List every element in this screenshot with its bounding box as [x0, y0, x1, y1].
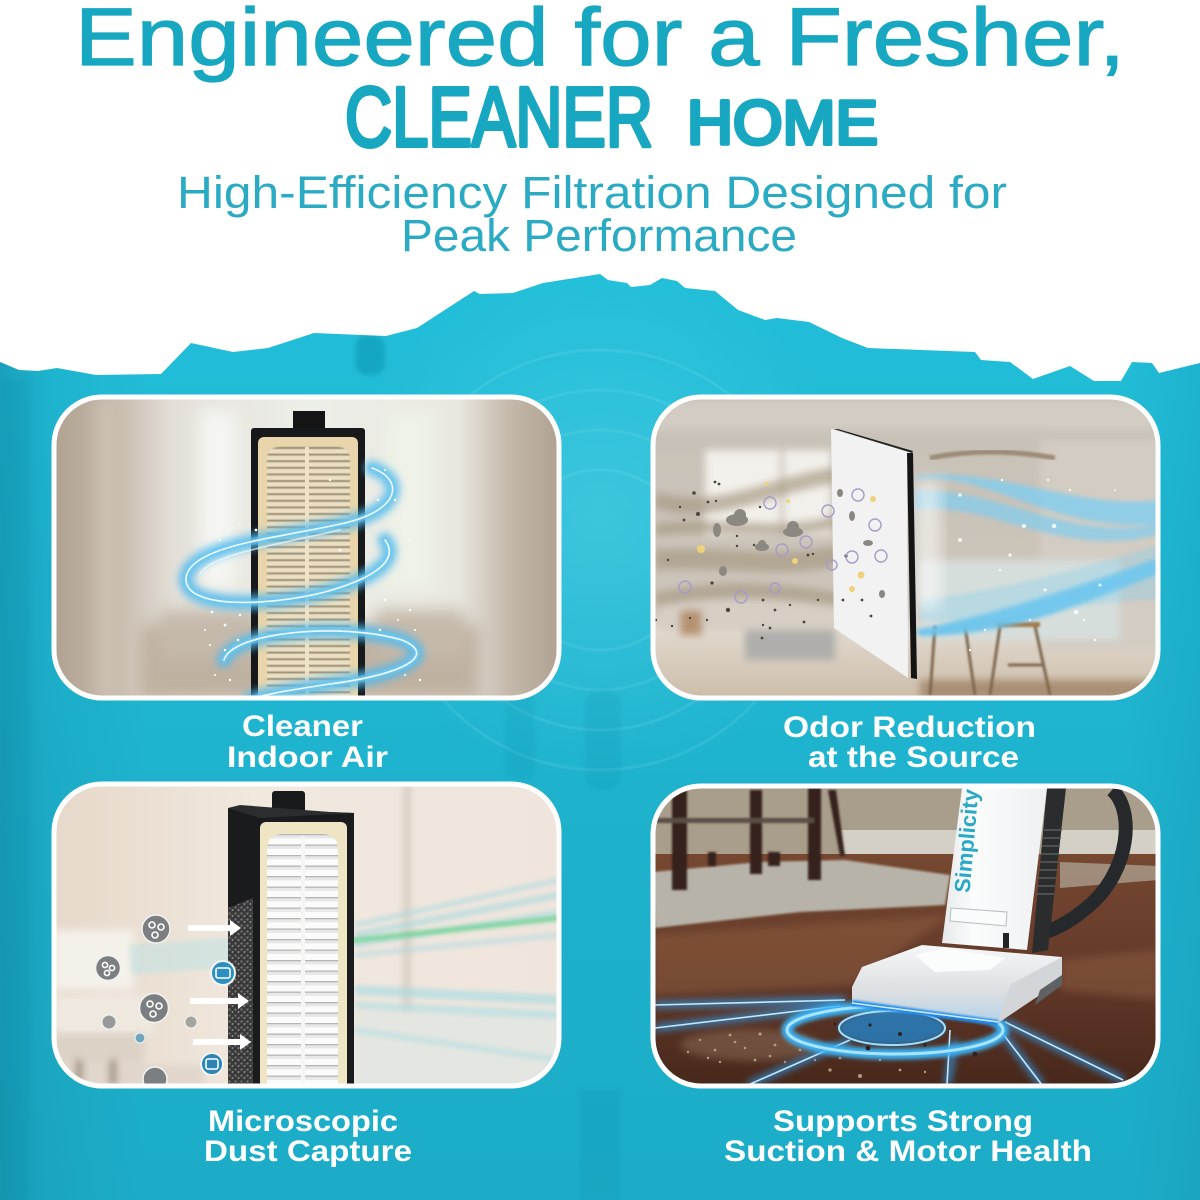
subtitle — [177, 167, 1007, 261]
icon: air swirl — [186, 468, 417, 700]
handwritten accent title: CLEANER — [345, 70, 653, 164]
caption: strong suction — [724, 1105, 1092, 1168]
air streams — [130, 880, 559, 1060]
panel: odor reduction — [653, 397, 1160, 700]
handwritten accent title: HOME — [687, 89, 878, 158]
icon: stool — [930, 622, 1050, 695]
subtitle: Peak Performance — [401, 210, 797, 261]
suction glow — [655, 1000, 1123, 1085]
caption: strong suction: Suction & Motor Health — [724, 1135, 1092, 1168]
caption: strong suction: Supports Strong — [773, 1105, 1033, 1138]
subtitle: High-Efficiency Filtration Designed for — [177, 167, 1007, 218]
chairs — [654, 788, 845, 890]
icon: hose — [1040, 790, 1126, 934]
caption: cleaner indoor air — [227, 710, 388, 774]
caption: microscopic dust capture: Dust Capture — [204, 1135, 412, 1168]
icon: ceiling lamp arc — [930, 452, 1055, 458]
dirty air streams — [655, 475, 840, 600]
odor particles — [655, 481, 887, 639]
caption: cleaner indoor air: Indoor Air — [227, 741, 388, 774]
title — [75, 0, 1125, 164]
panel: microscopic dust capture — [54, 784, 559, 1091]
dust particles — [199, 469, 421, 681]
icon: dust particles — [96, 915, 235, 1091]
icon: intake arrows — [188, 920, 251, 1050]
clean air streams — [915, 475, 1158, 636]
icon: filter cartridge with foam side — [228, 791, 354, 1090]
debris — [680, 1029, 926, 1078]
torn-edge teal background — [0, 274, 1200, 1200]
caption: odor reduction — [783, 711, 1036, 774]
caption: cleaner indoor air: Cleaner — [242, 710, 363, 743]
panel: strong suction — [653, 786, 1160, 1090]
icon: upright vacuum: Simplicity — [950, 787, 984, 894]
caption: microscopic dust capture — [204, 1105, 412, 1168]
icon: upright vacuum — [852, 787, 1066, 1023]
icon: flat filter pad — [831, 429, 940, 679]
panel: cleaner indoor air — [54, 397, 559, 703]
icon: filter cartridge — [251, 411, 365, 703]
caption: odor reduction: Odor Reduction — [783, 711, 1036, 744]
caption: odor reduction: at the Source — [808, 741, 1019, 774]
caption: microscopic dust capture: Microscopic — [208, 1105, 398, 1138]
rug — [653, 860, 950, 928]
